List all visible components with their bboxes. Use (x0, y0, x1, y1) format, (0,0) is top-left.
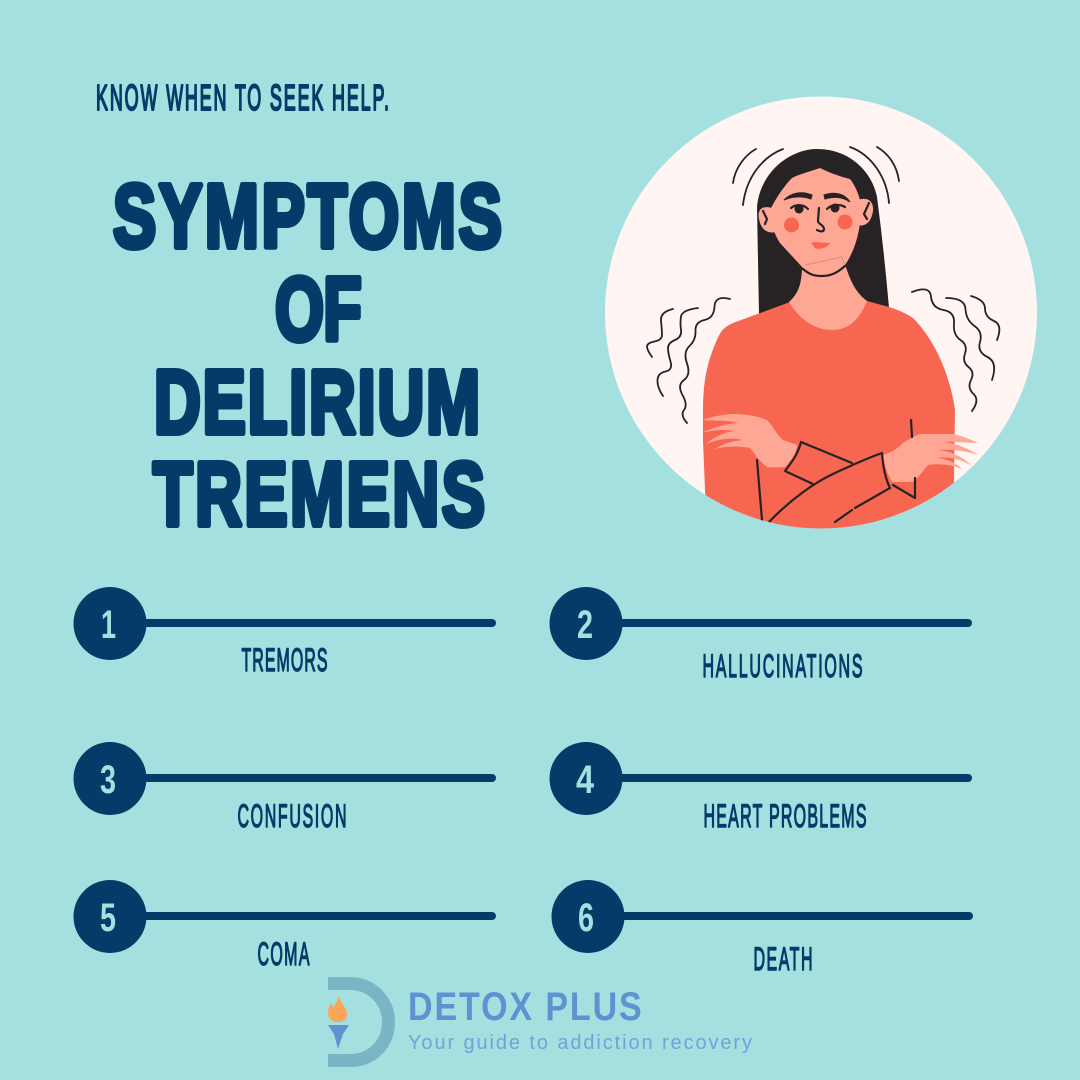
logo: detox plus: DETOX PLUS (408, 983, 642, 1029)
tagline: know when to seek help: KNOW WHEN TO SEEK HELP. (96, 78, 389, 119)
cheeks (784, 218, 799, 232)
mouth (811, 242, 830, 249)
item 6: death: 6 (578, 896, 594, 940)
body: coral sweater (703, 301, 955, 540)
item 3: confusion: 3 (100, 758, 116, 802)
item 5: coma (74, 880, 496, 973)
item 1: tremors: TREMORS (242, 643, 327, 679)
neck (789, 264, 867, 330)
shake lines: right side (912, 289, 999, 411)
shake lines: left side (647, 298, 730, 423)
title: DELIRIUM (154, 352, 480, 453)
title: SYMPTOMS (113, 166, 502, 267)
hands (701, 414, 797, 467)
item 4: heart problems (550, 742, 972, 835)
item 2: hallucinations: HALLUCINATIONS (702, 649, 862, 685)
eyebrows (784, 193, 850, 202)
title: TREMENS (153, 444, 485, 545)
item 2: hallucinations (550, 587, 972, 685)
logo: detox plus: Your guide to addiction recovery (408, 1032, 752, 1054)
logo: detox plus (328, 983, 752, 1060)
title (113, 166, 502, 545)
sleeve outlines (757, 420, 915, 522)
item 1: tremors: 1 (101, 603, 116, 647)
illustration: trembling woman in circle (605, 96, 1037, 540)
jaw line (803, 266, 845, 276)
item 2: hallucinations: 2 (577, 603, 593, 647)
nose (817, 208, 824, 231)
item 6: death: DEATH (754, 942, 813, 978)
title: OF (275, 260, 362, 360)
item 5: coma: COMA (258, 937, 310, 973)
item 1: tremors (74, 587, 496, 679)
ears (759, 199, 873, 232)
item 4: heart problems: HEART PROBLEMS (704, 799, 866, 835)
eyes (791, 205, 845, 209)
item 5: coma: 5 (100, 896, 116, 940)
icon: letter D with torch (328, 984, 388, 1060)
shake lines: head (733, 147, 899, 205)
item 3: confusion: CONFUSION (238, 799, 346, 835)
hair (757, 149, 889, 322)
item 4: heart problems: 4 (576, 758, 595, 802)
face (770, 168, 860, 276)
item 6: death (552, 880, 973, 978)
item 3: confusion (74, 742, 496, 835)
